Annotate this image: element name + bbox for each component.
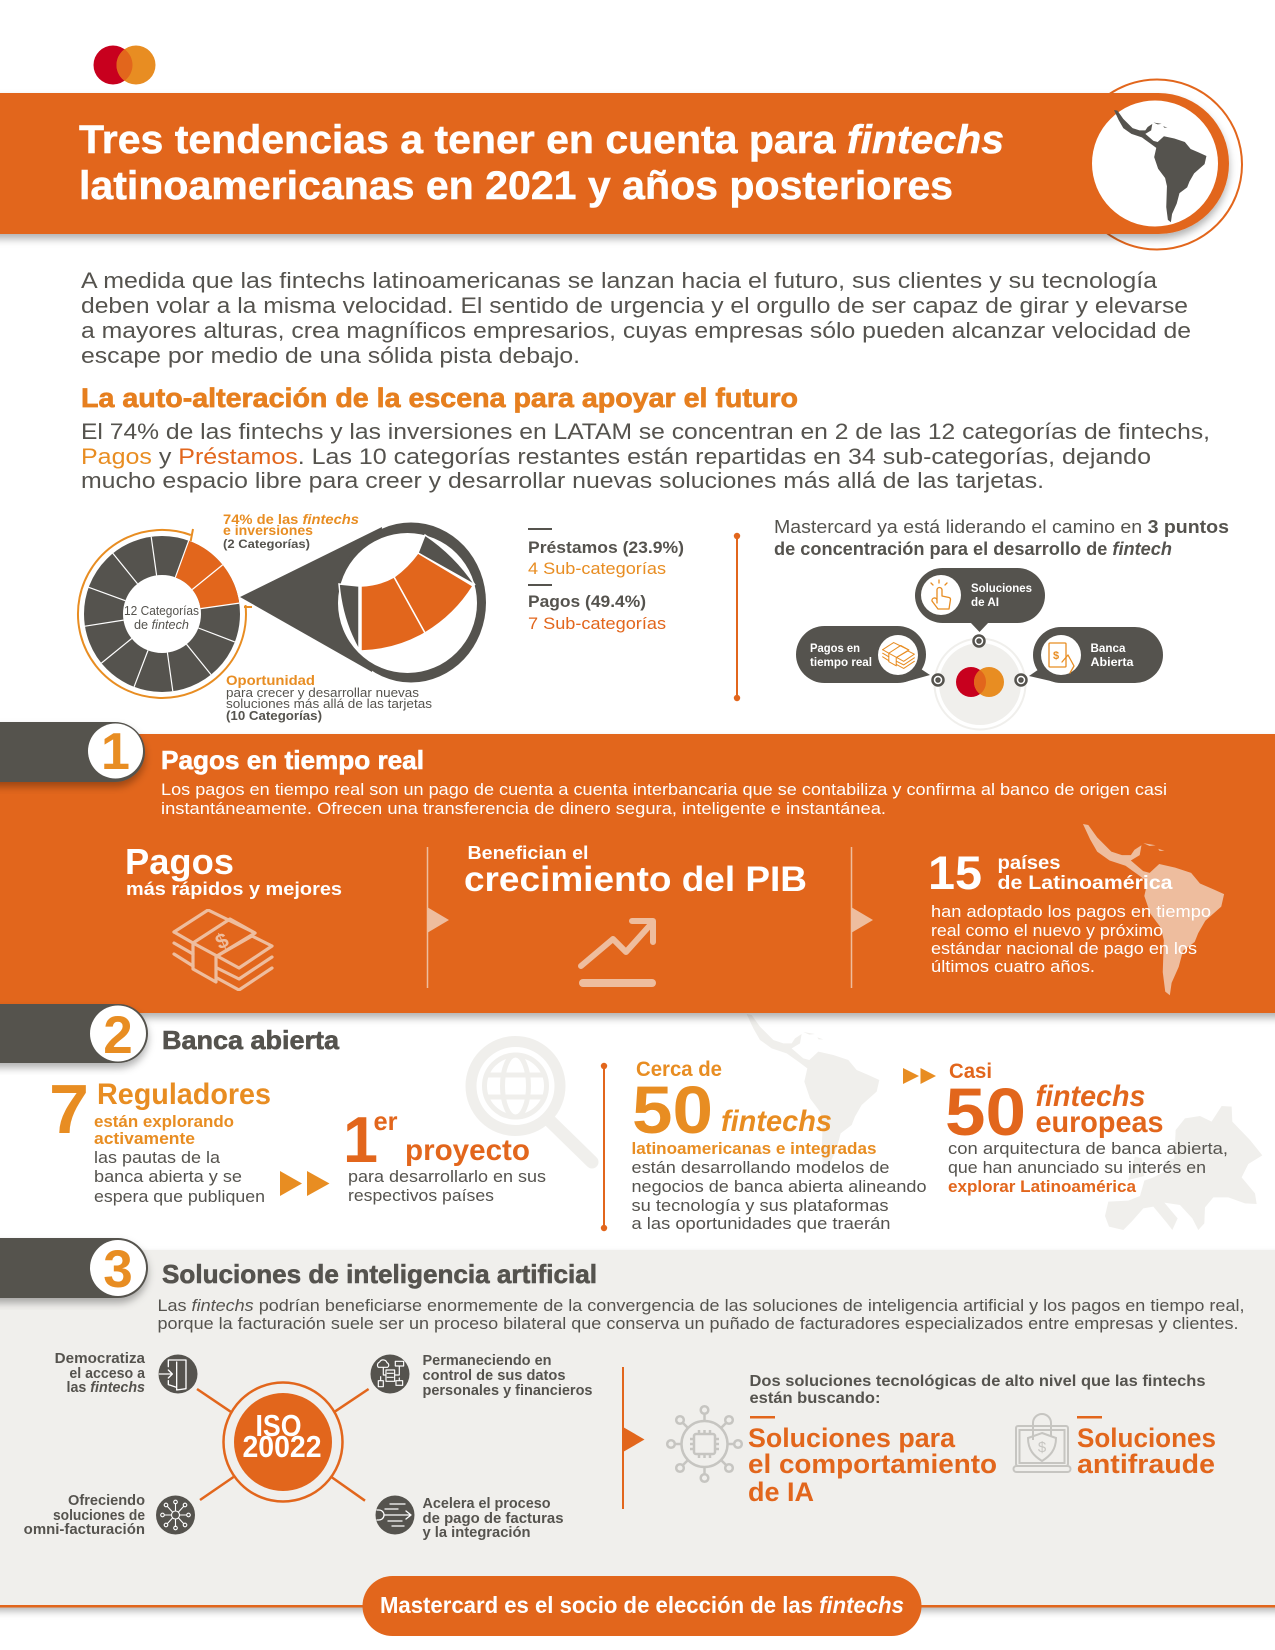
arrows: small double play — [903, 1068, 936, 1084]
bubble: open banking: Abierta — [1090, 657, 1134, 669]
text: Mastercard leading — [774, 517, 1229, 559]
vertical divider — [601, 1063, 607, 1231]
label: 74% of fintechs: 74% de las fintechs — [223, 511, 359, 527]
label: 74% of fintechs — [223, 511, 359, 551]
section 1 panel: real-time payments — [0, 722, 1275, 1013]
stat: 50 Latin American fintechs: a las oportunidades que traerán — [632, 1214, 890, 1233]
ISO 20022 hub: 20022 — [242, 1429, 322, 1464]
text: two solutions intro — [750, 1373, 1206, 1407]
icon: magnifier with globe — [471, 1042, 592, 1162]
section 1 heading: Pagos en tiempo real — [161, 745, 424, 775]
solution: AI behaviour — [748, 1416, 997, 1507]
stat: 50 Latin American fintechs: están desarrollando modelos de — [632, 1158, 890, 1177]
paragraph: 74% concentration: El 74% de las fintechs y las inversiones en LATAM se concentran en 2 de las 12 categorías de fintechs, — [81, 419, 1210, 444]
item: faster invoicing: y la integración — [422, 1525, 530, 1541]
bubble: AI solutions: de AI — [971, 597, 999, 609]
intro paragraph: escape por medio de una sólida pista debajo. — [81, 343, 580, 368]
donut chart: 12 fintech categories — [78, 529, 252, 698]
divider arrow 1 — [427, 847, 449, 988]
solution: AI behaviour: de IA — [748, 1477, 814, 1507]
title banner — [0, 80, 1242, 250]
ISO 20022 hub: ISO — [256, 1408, 302, 1443]
divider line — [734, 533, 740, 701]
section 2 background maps and magnifier — [471, 1014, 1262, 1230]
callout: magnified segments — [240, 522, 486, 682]
number tab 3: 3 — [103, 1240, 133, 1299]
stat: 15 countries: real como el nuevo y próximo — [931, 922, 1163, 940]
ISO 20022 hub — [224, 1382, 342, 1502]
number tab 3 — [0, 1238, 148, 1299]
paragraph: 74% concentration — [81, 419, 1210, 493]
section 3 description: Las fintechs podrían beneficiarse enormemente de la convergencia de las soluciones de inteligencia artificial y los pagos en tiempo real, — [158, 1296, 1244, 1315]
text: Mastercard leading: Mastercard ya está liderando el camino en 3 puntos — [774, 517, 1229, 537]
item: democratize access — [55, 1351, 198, 1396]
stat: 15 countries: 15 — [928, 846, 982, 899]
section 1 description: Los pagos en tiempo real son un pago de cuenta a cuenta interbancaria que se contabiliza y confirma al banco de origen casi — [161, 781, 1167, 799]
text: two solutions intro: están buscando: — [750, 1390, 880, 1407]
label: opportunity — [226, 672, 432, 723]
icon: laptop with lock — [1014, 1414, 1070, 1472]
number tab 1: 1 — [101, 723, 130, 781]
item: data control — [370, 1353, 592, 1399]
heading: auto-alteration: La auto-alteración de la escena para apoyar el futuro — [81, 383, 798, 413]
item: democratize access: el acceso a — [69, 1366, 146, 1382]
stat: GDP growth: Benefician el — [468, 842, 588, 863]
intro paragraph: a mayores alturas, crea magníficos empresarios, cuyas empresas sólo pueden alcanzar velocidad de — [81, 318, 1191, 343]
stat: 50 Latin American fintechs: negocios de banca abierta alineando — [632, 1177, 926, 1196]
section 1 description: instantáneamente. Ofrecen una transferencia de dinero segura, inteligente e instantánea. — [161, 800, 886, 818]
icon: money stacks: $ — [212, 928, 233, 954]
stat: 50 Latin American fintechs — [632, 1058, 926, 1233]
section 2: open banking — [0, 1004, 1228, 1233]
stat: 15 countries: han adoptado los pagos en tiempo — [931, 903, 1211, 921]
stat: 7 regulators: banca abierta y se — [94, 1167, 242, 1186]
map: Latin America light — [1083, 824, 1224, 995]
section 3 background panel — [0, 1250, 1275, 1606]
item: data control: personales y financieros — [422, 1383, 592, 1399]
paragraph: 74% concentration: Pagos y Préstamos . Las 10 categorías restantes están repartidas en 34 sub-categorías, dejando — [81, 444, 1151, 469]
legend: loans and payments — [528, 528, 684, 633]
stat: 15 countries: estándar nacional de pago en los — [931, 940, 1197, 958]
stat: 7 regulators: las pautas de la — [94, 1148, 221, 1167]
icon: Latin America map — [1114, 110, 1206, 222]
section 2 heading: Banca abierta — [162, 1025, 340, 1055]
bubble: AI solutions — [915, 568, 1045, 632]
connector lines — [197, 1389, 369, 1501]
stat: 50 European fintechs: 50 — [945, 1075, 1026, 1150]
item: faster invoicing: Acelera el proceso — [422, 1496, 551, 1512]
stat: 15 countries: últimos cuatro años. — [931, 958, 1095, 976]
solution: anti-fraud: Soluciones — [1077, 1423, 1216, 1453]
stat: 50 European fintechs: con arquitectura de banca abierta, — [948, 1139, 1228, 1158]
divider arrow 3 — [623, 1367, 644, 1509]
stat: 7 regulators: Reguladores — [97, 1078, 271, 1111]
label: opportunity: (10 Categorías) — [226, 709, 322, 723]
number tab 1 — [0, 722, 145, 782]
solution: anti-fraud: antifraude — [1077, 1449, 1215, 1479]
diagram: 3 focus points — [796, 568, 1163, 730]
stat: 50 European fintechs — [945, 1060, 1228, 1196]
label: 74% of fintechs: (2 Categorías) — [223, 537, 310, 551]
section 3 description: porque la facturación suele ser un proceso bilateral que conserva un puñado de facturadores especializados entre empresas y clientes. — [158, 1314, 1238, 1333]
solution: AI behaviour: Soluciones para — [748, 1423, 956, 1453]
paragraph: 74% concentration: mucho espacio libre para creer y desarrollar nuevas soluciones más allá de las tarjetas. — [81, 468, 1044, 493]
stat: faster payments — [125, 841, 342, 990]
item: data control: Permaneciendo en — [422, 1353, 552, 1369]
bubble: AI solutions: Soluciones — [971, 583, 1032, 595]
footer pill: Mastercard es el socio de elección de las fintechs — [380, 1592, 904, 1618]
stat: first project: respectivos países — [348, 1186, 494, 1205]
stat: 7 regulators: activamente — [94, 1130, 195, 1148]
icon: flow lines — [376, 1496, 414, 1534]
label: opportunity: soluciones más allá de las tarjetas — [226, 697, 432, 711]
footer pill — [362, 1576, 922, 1636]
stat: 7 regulators: 7 — [49, 1070, 89, 1148]
intro paragraph — [81, 268, 1191, 368]
item: data control: control de sus datos — [422, 1368, 566, 1384]
stat: 15 countries — [928, 846, 1211, 976]
icon: AI chip — [667, 1406, 742, 1482]
stat: 7 regulators: están explorando — [94, 1113, 234, 1131]
stat: GDP growth — [464, 842, 807, 987]
stat: 7 regulators — [49, 1070, 271, 1206]
stat: first project: proyecto — [405, 1134, 530, 1167]
item: omni-billing — [24, 1493, 195, 1538]
stat: faster payments: más rápidos y mejores — [126, 878, 342, 899]
bubble: open banking — [1029, 627, 1163, 683]
label: opportunity: Oportunidad — [226, 672, 315, 688]
stat: 50 European fintechs: que han anunciado su interés en — [948, 1158, 1206, 1177]
item: omni-billing: soluciones de — [53, 1508, 145, 1524]
section 3 baseline rule — [0, 1605, 1275, 1608]
stat: 50 Latin American fintechs: latinoamericanas e integradas — [632, 1140, 876, 1158]
stat: 15 countries: de Latinoamérica — [998, 873, 1173, 894]
solution: anti-fraud — [1077, 1416, 1216, 1479]
stat: first project: er — [374, 1106, 398, 1136]
stat: faster payments: Pagos — [125, 841, 234, 882]
connector dots — [932, 636, 1026, 686]
bubble: real-time payments: tiempo real — [810, 657, 872, 669]
logo: Mastercard — [94, 46, 156, 84]
text: two solutions intro: Dos soluciones tecnológicas de alto nivel que las fintechs — [750, 1373, 1206, 1390]
map: Europe faint — [1105, 1106, 1262, 1230]
stat: 50 Latin American fintechs: Cerca de — [636, 1058, 722, 1081]
legend: loans and payments: Pagos (49.4%) — [528, 592, 646, 611]
icon: data network — [370, 1354, 410, 1394]
number tab 2: 2 — [103, 1006, 133, 1065]
stat: 15 countries: países — [998, 853, 1060, 874]
intro paragraph: A medida que las fintechs latinoamericanas se lanzan hacia el futuro, sus clientes y su tecnología — [81, 268, 1158, 293]
icon: laptop with lock: $ — [1038, 1439, 1047, 1456]
stat: first project — [343, 1103, 546, 1205]
intro paragraph: deben volar a la misma velocidad. El sentido de urgencia y el orgullo de ser capaz de girar y elevarse — [81, 293, 1188, 318]
stat: 50 Latin American fintechs: fintechs — [721, 1105, 832, 1138]
bubble: real-time payments — [796, 626, 930, 683]
label: opportunity: para crecer y desarrollar nuevas — [226, 686, 419, 700]
stat: GDP growth: crecimiento del PIB — [464, 860, 807, 899]
legend: loans and payments: 7 Sub-categorías — [528, 614, 666, 633]
icon: door — [158, 1354, 198, 1394]
item: democratize access: Democratiza — [55, 1351, 146, 1367]
stat: 50 European fintechs: fintechs — [1036, 1080, 1146, 1113]
bubble: open banking: Banca — [1090, 643, 1126, 655]
divider arrow 2 — [851, 847, 873, 988]
section 1 description — [161, 781, 1167, 818]
bubble: open banking: $ — [1053, 650, 1059, 662]
number tab 2 — [0, 1004, 148, 1065]
item: omni-billing: omni-facturación — [24, 1522, 145, 1538]
arrows: double play — [280, 1171, 330, 1196]
stat: 50 Latin American fintechs: 50 — [632, 1073, 713, 1148]
section 3 description — [158, 1296, 1244, 1333]
stat: 7 regulators: espera que publiquen — [94, 1187, 265, 1206]
icon: hub and spokes — [156, 1496, 195, 1534]
bubble: real-time payments: Pagos en — [810, 643, 860, 655]
Mastercard hub — [934, 638, 1026, 730]
title text: Tres tendencias a tener en cuenta para fintechs — [79, 118, 1004, 162]
legend: loans and payments: Préstamos (23.9%) — [528, 538, 684, 557]
stat: 50 European fintechs: europeas — [1036, 1106, 1164, 1139]
item: faster invoicing — [376, 1496, 564, 1541]
title text — [79, 118, 1004, 208]
stat: first project: 1 — [343, 1103, 378, 1176]
stat: 50 European fintechs: explorar Latinoamérica — [948, 1178, 1137, 1196]
icon: growth arrow — [579, 921, 656, 987]
icon: money stacks — [174, 910, 272, 990]
item: faster invoicing: de pago de facturas — [422, 1511, 564, 1527]
legend: loans and payments: 4 Sub-categorías — [528, 559, 666, 578]
stat: 50 Latin American fintechs: su tecnología y sus plataformas — [632, 1196, 888, 1215]
text: Mastercard leading: de concentración para el desarrollo de fintech — [774, 539, 1172, 559]
label: 74% of fintechs: e inversiones — [223, 522, 313, 538]
title text: latinoamericanas en 2021 y años posteriores — [79, 164, 953, 208]
map: Latin America faint — [747, 1014, 879, 1175]
stat: first project: para desarrollarlo en sus — [348, 1167, 546, 1186]
section 3: AI solutions — [0, 1238, 1244, 1541]
section 3 heading: Soluciones de inteligencia artificial — [162, 1259, 597, 1289]
donut chart: 12 fintech categories: 12 Categorías — [124, 603, 199, 618]
item: democratize access: las fintechs — [66, 1380, 145, 1396]
donut chart: 12 fintech categories: de fintech — [134, 617, 189, 632]
solution: AI behaviour: el comportamiento — [748, 1449, 997, 1479]
stat: 50 European fintechs: Casi — [949, 1060, 992, 1083]
item: omni-billing: Ofreciendo — [68, 1493, 145, 1509]
